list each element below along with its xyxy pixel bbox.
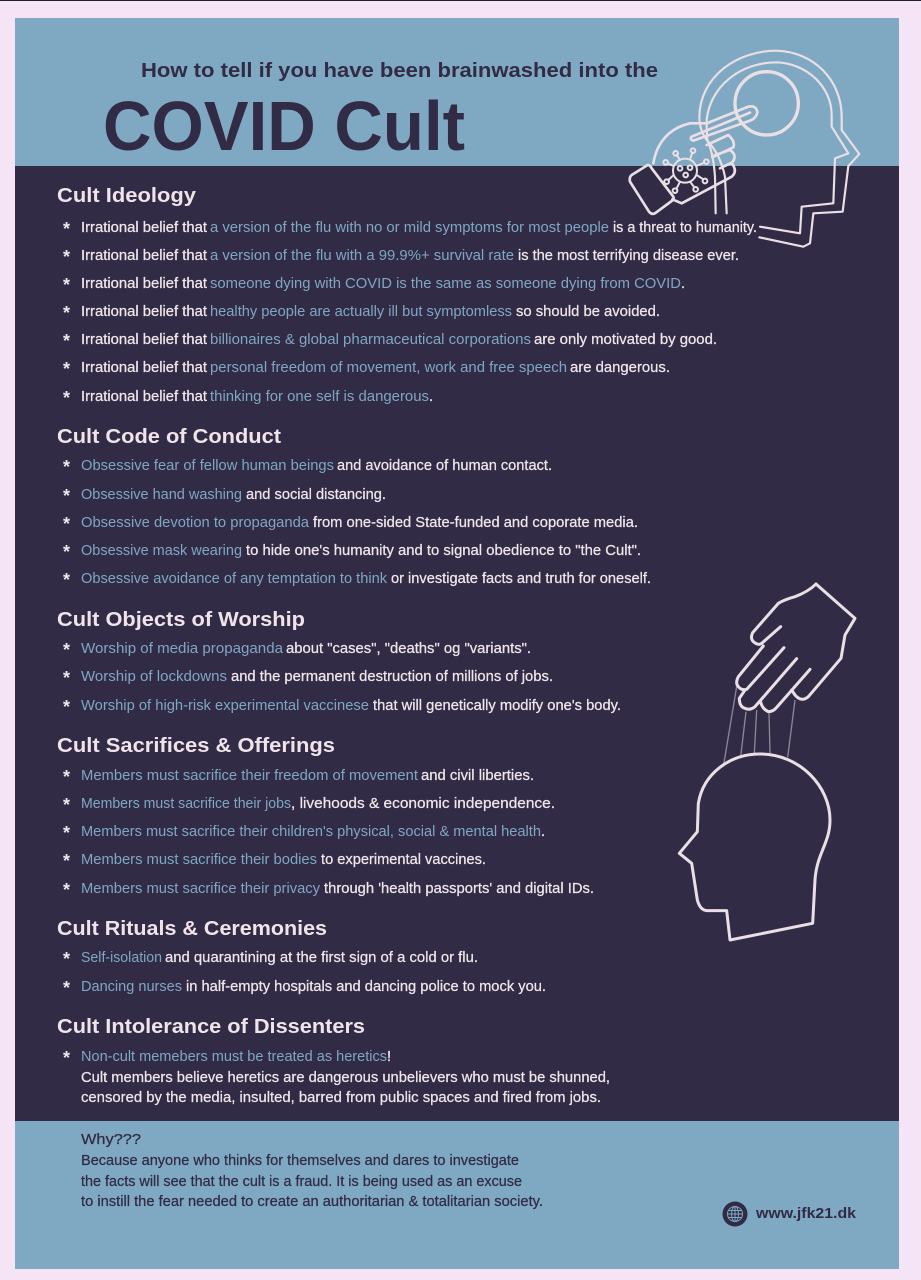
list item	[63, 795, 555, 815]
list item: a version of the flu with a 99.9%+ survival rate	[210, 248, 514, 264]
list item	[63, 949, 478, 969]
list item: *	[63, 880, 70, 900]
list item	[63, 668, 553, 688]
heading: Cult Ideology	[57, 185, 197, 207]
list item: about "cases", "deaths" og "variants".	[286, 641, 531, 657]
list item: so should be avoided.	[516, 304, 660, 320]
list item: *	[63, 1048, 70, 1068]
panel: main dark body	[15, 166, 899, 1121]
list item: Irrational belief that	[81, 220, 207, 236]
list item: and avoidance of human contact.	[337, 458, 552, 474]
list item: *	[63, 542, 70, 562]
list item	[63, 486, 386, 506]
list item	[63, 514, 638, 534]
icon: head outline with target circle	[699, 51, 859, 247]
website link with globe icon	[722, 1202, 857, 1226]
text block: why: to instill the fear needed to create an authoritarian & totalitarian society.	[81, 1194, 543, 1210]
list item	[63, 275, 685, 295]
icon: puppeteer hand	[737, 584, 855, 712]
list item: !	[387, 1049, 391, 1065]
list item: to experimental vaccines.	[321, 852, 486, 868]
list item	[63, 767, 534, 787]
heading: subtitle: How to tell if you have been brainwashed into the	[141, 60, 658, 82]
list item: *	[63, 697, 70, 717]
list item	[63, 851, 486, 871]
heading: Cult Intolerance of Dissenters	[57, 1016, 365, 1038]
icon: pointing hand with virus	[630, 106, 757, 214]
section: cult ideology	[57, 185, 757, 408]
list item: Members must sacrifice their privacy	[81, 881, 321, 897]
list item: someone dying with COVID is the same as someone dying from COVID	[210, 276, 681, 292]
list item: *	[63, 823, 70, 843]
list item	[63, 542, 641, 562]
list item: *	[63, 851, 70, 871]
list item: Irrational belief that	[81, 332, 207, 348]
list item: Worship of media propaganda	[81, 641, 284, 657]
list item	[63, 640, 531, 660]
list item: *	[63, 359, 70, 379]
list item	[63, 303, 660, 323]
text block: why: Why???	[81, 1132, 141, 1148]
list item: *	[63, 640, 70, 660]
list item: through 'health passports' and digital IDs.	[324, 881, 594, 897]
list item: that will genetically modify one's body.	[373, 698, 621, 714]
list item	[63, 880, 594, 900]
list item: .	[429, 389, 433, 405]
website link with globe icon: www.jfk21.dk	[755, 1205, 857, 1222]
list item: *	[63, 795, 70, 815]
list item: Members must sacrifice their jobs	[81, 796, 291, 812]
list item: Irrational belief that	[81, 360, 207, 376]
list item: Obsessive avoidance of any temptation to think	[81, 571, 388, 587]
section: cult intolerance of dissenters	[57, 1016, 610, 1106]
icon: puppet strings	[723, 687, 795, 767]
icon: globe	[722, 1202, 748, 1226]
list item: censored by the media, insulted, barred from public spaces and fired from jobs.	[81, 1090, 601, 1106]
list item: *	[63, 457, 70, 477]
list item: is the most terrifying disease ever.	[518, 248, 739, 264]
icon: controlled head	[679, 754, 830, 940]
list item: , livehoods & economic independence.	[291, 796, 555, 812]
list item: *	[63, 949, 70, 969]
list item: Members must sacrifice their bodies	[81, 852, 317, 868]
title: COVID Cult	[103, 87, 465, 165]
text block: why	[81, 1132, 543, 1210]
list item: Non-cult memebers must be treated as heretics	[81, 1049, 387, 1065]
list item: *	[63, 219, 70, 239]
list item: Obsessive hand washing	[81, 487, 242, 503]
list item: and the permanent destruction of millions of jobs.	[231, 669, 553, 685]
list item	[63, 247, 739, 267]
list item	[63, 359, 670, 379]
text block: why: Because anyone who thinks for themselves and dares to investigate	[81, 1153, 519, 1169]
list item: and social distancing.	[246, 487, 386, 503]
list item: and civil liberties.	[421, 768, 534, 784]
icon: virus	[663, 148, 709, 193]
heading: Cult Objects of Worship	[57, 609, 305, 631]
heading: Cult Rituals & Ceremonies	[57, 918, 327, 940]
list item	[63, 331, 717, 351]
list item: Members must sacrifice their freedom of movement	[81, 768, 418, 784]
section: cult rituals and ceremonies	[57, 918, 546, 998]
list item: .	[681, 276, 685, 292]
section: cult code of conduct	[57, 426, 651, 590]
list item: Members must sacrifice their children's physical, social & mental health	[81, 824, 541, 840]
list item: .	[541, 824, 545, 840]
list item: Irrational belief that	[81, 304, 207, 320]
list item: billionaires & global pharmaceutical corporations	[210, 332, 531, 348]
list item: *	[63, 388, 70, 408]
list item: *	[63, 767, 70, 787]
list item: are dangerous.	[570, 360, 670, 376]
list item: is a threat to humanity.	[613, 220, 757, 236]
list item: Cult members believe heretics are dangerous unbelievers who must be shunned,	[81, 1070, 610, 1086]
section: cult sacrifices and offerings	[57, 735, 594, 900]
list item: in half-empty hospitals and dancing police to mock you.	[186, 979, 546, 995]
list item: *	[63, 486, 70, 506]
list item: are only motivated by good.	[534, 332, 717, 348]
list item: and quarantining at the first sign of a cold or flu.	[165, 950, 478, 966]
list item: *	[63, 303, 70, 323]
panel: footer	[15, 1121, 899, 1269]
list item: Irrational belief that	[81, 276, 207, 292]
list item: or investigate facts and truth for oneself.	[391, 571, 651, 587]
list item	[63, 388, 433, 408]
heading: Cult Code of Conduct	[57, 426, 281, 448]
list item	[63, 978, 546, 998]
list item: thinking for one self is dangerous	[210, 389, 429, 405]
list item: *	[63, 514, 70, 534]
text block: why: the facts will see that the cult is a fraud. It is being used as an excuse	[81, 1174, 522, 1190]
list item: Irrational belief that	[81, 248, 207, 264]
panel: header	[15, 18, 899, 166]
list item: *	[63, 275, 70, 295]
list item: *	[63, 668, 70, 688]
list item: a version of the flu with no or mild symptoms for most people	[210, 220, 609, 236]
section: cult objects of worship	[57, 609, 621, 717]
list item	[63, 697, 621, 717]
list item: healthy people are actually ill but symptomless	[210, 304, 512, 320]
list item: *	[63, 247, 70, 267]
list item: Dancing nurses	[81, 979, 182, 995]
list item: to hide one's humanity and to signal obedience to "the Cult".	[246, 543, 641, 559]
list item	[63, 219, 757, 239]
list item: *	[63, 978, 70, 998]
list item	[63, 1048, 610, 1106]
list item: Worship of high-risk experimental vaccinese	[81, 698, 369, 714]
list item: from one-sided State-funded and coporate media.	[313, 515, 638, 531]
list item: personal freedom of movement, work and free speech	[210, 360, 567, 376]
list item: *	[63, 570, 70, 590]
list item	[63, 457, 552, 477]
list item: Worship of lockdowns	[81, 669, 227, 685]
list item: *	[63, 331, 70, 351]
heading: Cult Sacrifices & Offerings	[57, 735, 335, 757]
list item: Obsessive fear of fellow human beings	[81, 458, 334, 474]
list item	[63, 570, 651, 590]
list item: Obsessive devotion to propaganda	[81, 515, 310, 531]
list item: Obsessive mask wearing	[81, 543, 242, 559]
list item: Irrational belief that	[81, 389, 207, 405]
list item: Self-isolation	[81, 950, 162, 966]
